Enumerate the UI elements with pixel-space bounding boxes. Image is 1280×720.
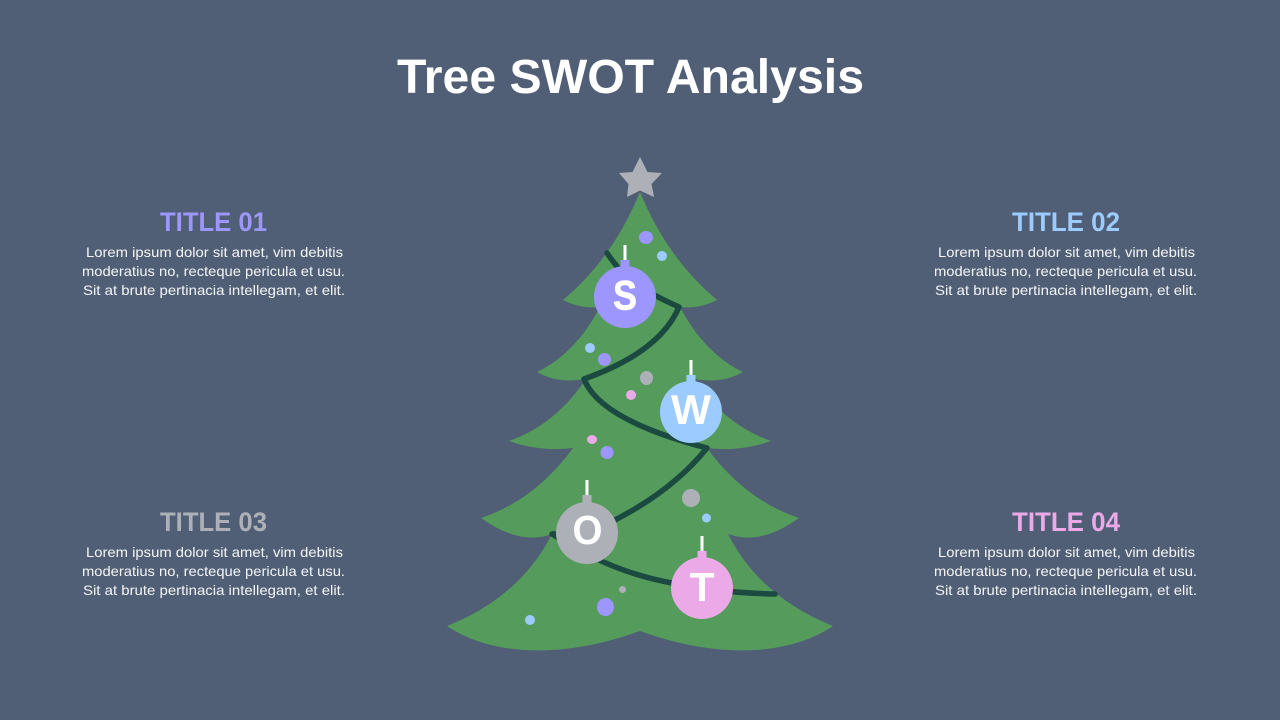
text block: title 02: moderatius no, recteque pericula et usu. <box>934 263 1197 279</box>
panel: title 04 <box>934 507 1197 598</box>
ornament: W <box>660 360 722 443</box>
decorative dots <box>525 231 711 625</box>
title: Tree SWOT Analysis <box>397 51 864 104</box>
ornament: S: S <box>613 272 637 318</box>
text block: title 04: Lorem ipsum dolor sit amet, vim debitis <box>938 544 1195 560</box>
icon: star <box>619 157 662 197</box>
text block: title 02 <box>934 244 1197 298</box>
garland <box>552 253 775 594</box>
text block: title 01 <box>82 244 345 298</box>
ornament: T <box>671 536 733 619</box>
text block: title 02: Sit at brute pertinacia intellegam, et elit. <box>935 282 1197 298</box>
text block: title 01: moderatius no, recteque pericula et usu. <box>82 263 345 279</box>
text block: title 04: moderatius no, recteque pericula et usu. <box>934 563 1197 579</box>
ornament: W: W <box>671 386 711 433</box>
ornament: O: O <box>572 507 602 553</box>
text block: title 03: Sit at brute pertinacia intellegam, et elit. <box>83 582 345 598</box>
ornament: O <box>556 480 618 564</box>
text block: title 02: Lorem ipsum dolor sit amet, vim debitis <box>938 244 1195 260</box>
heading: title 04: TITLE 04 <box>1012 507 1120 537</box>
text block: title 03 <box>82 544 345 598</box>
panel: title 03 <box>82 507 345 598</box>
heading: title 02: TITLE 02 <box>1012 207 1120 237</box>
ornament: S <box>594 245 656 328</box>
text block: title 04: Sit at brute pertinacia intellegam, et elit. <box>935 582 1197 598</box>
christmas tree diagram <box>447 157 833 650</box>
ornament: T: T <box>689 564 715 610</box>
text block: title 01: Lorem ipsum dolor sit amet, vim debitis <box>86 244 343 260</box>
heading: title 01: TITLE 01 <box>160 207 267 237</box>
panel: title 02 <box>934 207 1197 298</box>
heading: title 03: TITLE 03 <box>160 507 267 537</box>
tree body <box>447 192 833 650</box>
panel: title 01 <box>82 207 345 298</box>
text block: title 03: moderatius no, recteque pericula et usu. <box>82 563 345 579</box>
text block: title 03: Lorem ipsum dolor sit amet, vim debitis <box>86 544 343 560</box>
text block: title 01: Sit at brute pertinacia intellegam, et elit. <box>83 282 345 298</box>
text block: title 04 <box>934 544 1197 598</box>
